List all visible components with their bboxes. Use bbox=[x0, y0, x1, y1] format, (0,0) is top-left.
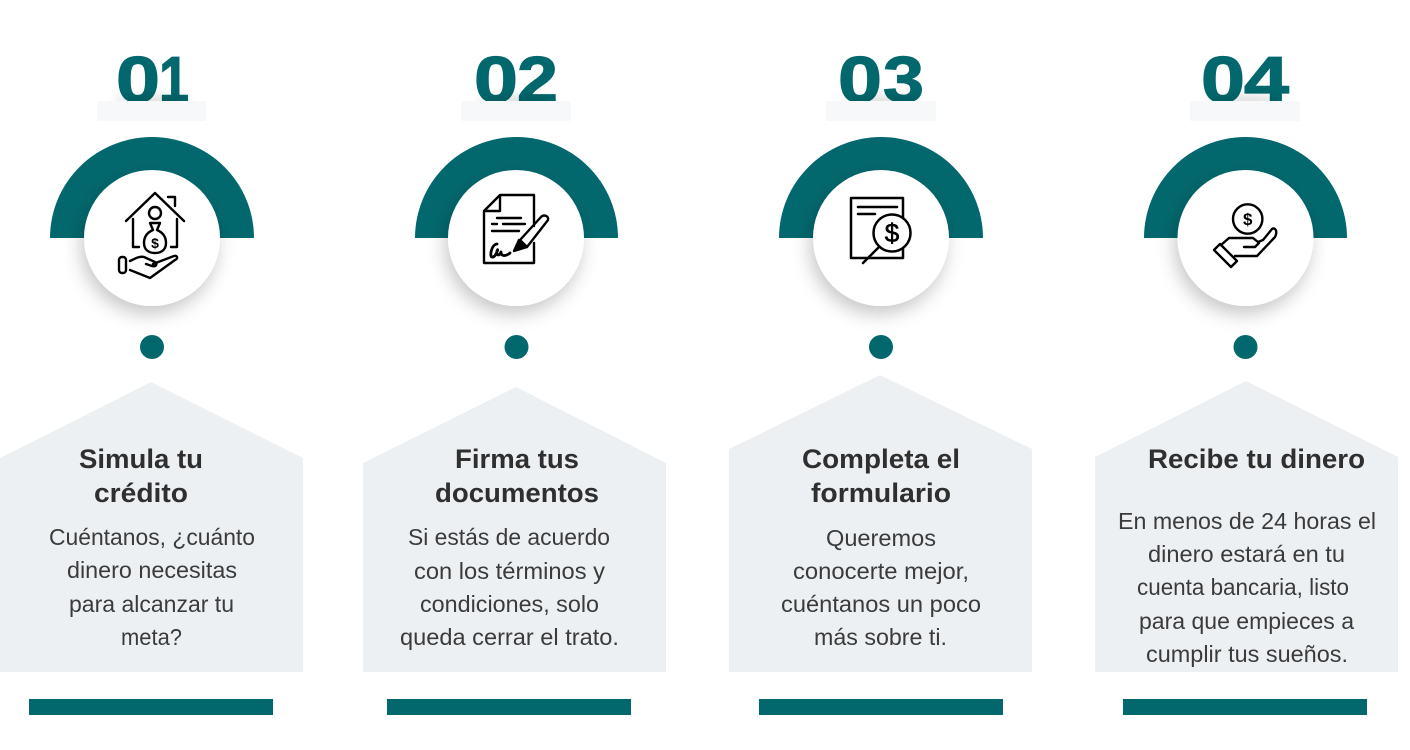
number 04: 4 bbox=[1244, 43, 1289, 116]
description: conocerte mejor, bbox=[793, 558, 969, 584]
dot bbox=[1234, 335, 1258, 359]
bar bbox=[759, 699, 1003, 715]
panel bbox=[363, 387, 666, 672]
white circle bbox=[1178, 170, 1314, 306]
arc bbox=[779, 137, 983, 238]
description: queda cerrar el trato. bbox=[400, 624, 619, 650]
heading bbox=[802, 444, 960, 508]
white circle bbox=[448, 170, 584, 306]
description bbox=[400, 524, 619, 650]
icon: signed document with pen bbox=[484, 195, 548, 263]
description bbox=[781, 525, 981, 650]
description: dinero estará en tu bbox=[1148, 541, 1345, 567]
icon: house, money bag and hand bbox=[119, 193, 184, 278]
description: para alcanzar tu bbox=[69, 591, 234, 617]
description bbox=[49, 524, 255, 650]
dot bbox=[140, 335, 164, 359]
heading: Firma tus bbox=[455, 444, 579, 474]
description: para que empieces a bbox=[1139, 608, 1354, 634]
number 02: 2 bbox=[517, 43, 558, 116]
white circle bbox=[813, 170, 949, 306]
description: Cuéntanos, ¿cuánto bbox=[49, 524, 255, 550]
step 1 bbox=[0, 43, 303, 715]
description: cumplir tus sueños. bbox=[1146, 641, 1348, 667]
arc bbox=[1144, 137, 1347, 238]
arc bbox=[415, 137, 618, 238]
number 01: 0 bbox=[116, 43, 160, 116]
number 03: 3 bbox=[883, 43, 924, 116]
number 04: 0 bbox=[1201, 43, 1245, 116]
icon: house, money bag and hand: $ bbox=[151, 235, 159, 251]
icon: hand holding coin bbox=[1214, 204, 1276, 267]
description: cuéntanos un poco bbox=[781, 591, 981, 617]
dot bbox=[504, 335, 528, 359]
panel bbox=[729, 375, 1032, 672]
arc bbox=[50, 137, 254, 238]
description: Queremos bbox=[826, 525, 936, 551]
step 2 bbox=[363, 43, 666, 715]
number 01 bbox=[97, 43, 206, 121]
icon: hand holding coin: $ bbox=[1243, 210, 1253, 229]
number 02 bbox=[461, 43, 571, 121]
panel bbox=[0, 382, 303, 672]
dot bbox=[869, 335, 893, 359]
heading bbox=[435, 444, 599, 508]
white circle bbox=[84, 170, 220, 306]
bar bbox=[1123, 699, 1367, 715]
bar bbox=[387, 699, 631, 715]
description: cuenta bancaria, listo bbox=[1137, 574, 1349, 600]
heading: formulario bbox=[811, 478, 951, 508]
description: condiciones, solo bbox=[420, 591, 599, 617]
heading: Completa el bbox=[802, 444, 960, 474]
number 04 bbox=[1190, 43, 1300, 121]
description: meta? bbox=[121, 624, 182, 650]
number 03 bbox=[826, 43, 936, 121]
heading bbox=[79, 444, 203, 508]
description: Si estás de acuerdo bbox=[408, 524, 610, 550]
number 01: 1 bbox=[159, 43, 189, 116]
description: dinero necesitas bbox=[67, 557, 237, 583]
heading: Recibe tu dinero bbox=[1148, 444, 1365, 474]
heading: Simula tu bbox=[79, 444, 203, 474]
description: más sobre ti. bbox=[814, 624, 947, 650]
icon: form under magnifier bbox=[851, 198, 910, 263]
description bbox=[1118, 508, 1376, 667]
panel bbox=[1095, 381, 1398, 672]
description: con los términos y bbox=[414, 558, 606, 584]
step 3 bbox=[729, 43, 1032, 715]
description: En menos de 24 horas el bbox=[1118, 508, 1376, 534]
icon: form under magnifier: $ bbox=[885, 218, 900, 248]
number 02: 0 bbox=[474, 43, 518, 116]
bar bbox=[29, 699, 273, 715]
heading: documentos bbox=[435, 478, 599, 508]
heading: crédito bbox=[94, 478, 188, 508]
step 4 bbox=[1095, 43, 1398, 715]
number 03: 0 bbox=[838, 43, 882, 116]
